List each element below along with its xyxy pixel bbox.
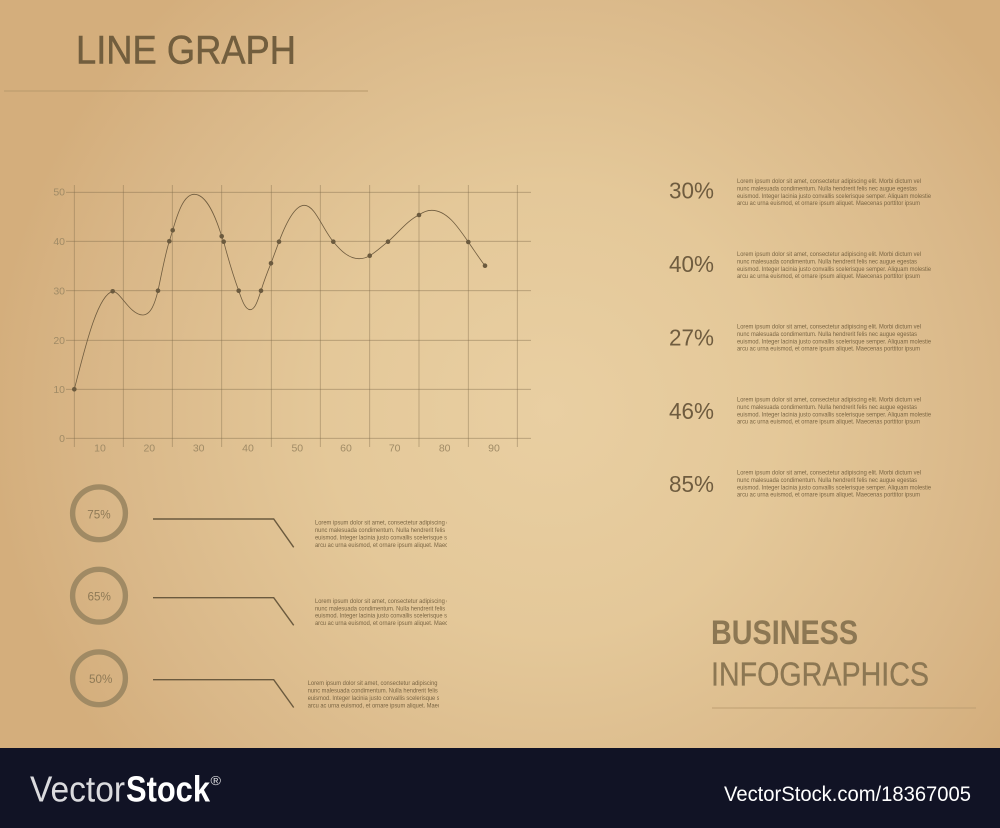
donut row: 75%: nunc malesuada condimentum. Nulla hendrerit felis nec augue egestas [315, 527, 495, 534]
stat: 30%: nunc malesuada condimentum. Nulla hendrerit felis nec augue egestas [737, 186, 917, 192]
donut row: 65%: arcu ac urna euismod, et ornare ipsum aliquet. Maecenas porttitor ipsum [315, 620, 498, 627]
footer logo: ® [210, 773, 221, 788]
stat: 85%: arcu ac urna euismod, et ornare ipsum aliquet. Maecenas porttitor ipsum [737, 492, 920, 498]
donut row: 75%: Lorem ipsum dolor sit amet, consectetur adipiscing elit. Morbi dictum vel [315, 520, 499, 526]
business infographics heading: INFOGRAPHICS [711, 656, 929, 694]
y axis labels [53, 187, 65, 445]
donut row: 50%: 50% [89, 672, 113, 686]
x axis labels [94, 443, 500, 455]
donut row: 50%: arcu ac urna euismod, et ornare ipsum aliquet. Maecenas porttitor ipsum [308, 702, 491, 709]
donut row: 50% [70, 649, 439, 709]
stat: 27%: Lorem ipsum dolor sit amet, consectetur adipiscing elit. Morbi dictum vel [737, 324, 921, 330]
stat: 40%: Lorem ipsum dolor sit amet, consectetur adipiscing elit. Morbi dictum vel [737, 251, 921, 258]
donut row: 65% [70, 566, 447, 626]
stat: 27%: euismod. Integer lacinia justo convallis scelerisque semper. Aliquam molestie [737, 338, 932, 346]
x axis labels: 20 [143, 443, 155, 455]
stat: 40%: 40% [669, 251, 714, 277]
stat: 46%: 46% [669, 398, 714, 424]
stat: 85%: Lorem ipsum dolor sit amet, consectetur adipiscing elit. Morbi dictum vel [737, 470, 921, 476]
footer logo: Stock [126, 769, 211, 810]
stat: 30%: Lorem ipsum dolor sit amet, consectetur adipiscing elit. Morbi dictum vel [737, 178, 921, 185]
stat: 46%: Lorem ipsum dolor sit amet, consectetur adipiscing elit. Morbi dictum vel [737, 396, 921, 404]
stat: 46%: euismod. Integer lacinia justo convallis scelerisque semper. Aliquam molestie [737, 412, 932, 418]
donut row: 75% [73, 487, 510, 549]
y axis labels: 20 [53, 335, 65, 347]
data points [72, 213, 487, 392]
donut row: 50%: Lorem ipsum dolor sit amet, consectetur adipiscing elit. Morbi dictum vel [308, 680, 492, 687]
stat: 85%: euismod. Integer lacinia justo convallis scelerisque semper. Aliquam molestie [737, 484, 932, 492]
stat: 30% [669, 177, 932, 207]
stat: 85%: nunc malesuada condimentum. Nulla hendrerit felis nec augue egestas [737, 477, 917, 484]
stat: 27%: 27% [669, 324, 714, 350]
stat: 27%: arcu ac urna euismod, et ornare ipsum aliquet. Maecenas porttitor ipsum [737, 346, 920, 352]
donut row: 75%: euismod. Integer lacinia justo convallis scelerisque semper. Aliquam molestie [315, 534, 510, 541]
stat: 40%: nunc malesuada condimentum. Nulla hendrerit felis nec augue egestas [737, 258, 917, 266]
x axis labels: 70 [389, 443, 401, 455]
stat: 46%: nunc malesuada condimentum. Nulla hendrerit felis nec augue egestas [737, 404, 917, 411]
y axis labels: 50 [53, 187, 65, 199]
footer logo: Vector [30, 769, 125, 810]
business infographics heading: BUSINESS [711, 614, 858, 652]
x axis labels: 80 [439, 443, 451, 455]
donut row: 50%: euismod. Integer lacinia justo convallis scelerisque semper. Aliquam molestie [308, 695, 502, 702]
donut row: 50%: nunc malesuada condimentum. Nulla hendrerit felis nec augue egestas [308, 688, 488, 694]
y axis labels: 0 [59, 433, 65, 445]
x axis labels: 90 [488, 443, 500, 455]
stat: 27% [669, 324, 932, 352]
donut row: 65%: nunc malesuada condimentum. Nulla hendrerit felis nec augue egestas [315, 605, 495, 612]
y axis labels: 10 [53, 384, 65, 396]
donut row: 65%: 65% [88, 590, 111, 604]
donut row: 75%: arcu ac urna euismod, et ornare ipsum aliquet. Maecenas porttitor ipsum [315, 542, 498, 549]
footer image id: VectorStock.com/18367005 [724, 783, 971, 806]
stat: 40%: euismod. Integer lacinia justo convallis scelerisque semper. Aliquam molestie [737, 266, 932, 273]
stat: 85% [669, 470, 932, 498]
x axis labels: 30 [193, 443, 205, 455]
stat: 46% [669, 396, 932, 426]
donut row: 65%: Lorem ipsum dolor sit amet, consectetur adipiscing elit. Morbi dictum vel [315, 598, 499, 605]
stat: 46%: arcu ac urna euismod, et ornare ipsum aliquet. Maecenas porttitor ipsum [737, 418, 920, 426]
donut row: 65%: euismod. Integer lacinia justo convallis scelerisque semper. Aliquam molestie [315, 613, 510, 620]
stat: 27%: nunc malesuada condimentum. Nulla hendrerit felis nec augue egestas [737, 331, 917, 338]
x axis labels: 40 [242, 443, 254, 455]
x axis labels: 10 [94, 443, 106, 455]
y axis labels: 30 [53, 285, 65, 297]
business infographics heading [711, 614, 976, 708]
stat: 40%: arcu ac urna euismod, et ornare ipsum aliquet. Maecenas porttitor ipsum [737, 273, 920, 280]
line chart [53, 185, 531, 455]
footer bar [0, 748, 1000, 828]
stat: 40% [669, 251, 932, 280]
y axis labels: 40 [53, 236, 65, 248]
footer logo [30, 769, 221, 810]
x axis labels: 60 [340, 443, 352, 455]
stat: 85%: 85% [669, 471, 714, 497]
title: LINE GRAPH [76, 28, 296, 72]
stat: 30%: euismod. Integer lacinia justo convallis scelerisque semper. Aliquam molestie [737, 193, 932, 200]
data curve [74, 194, 485, 389]
stat: 30%: arcu ac urna euismod, et ornare ipsum aliquet. Maecenas porttitor ipsum [737, 200, 920, 207]
stat: 30%: 30% [669, 177, 714, 203]
x axis labels: 50 [291, 443, 303, 455]
donut row: 75%: 75% [87, 508, 111, 522]
